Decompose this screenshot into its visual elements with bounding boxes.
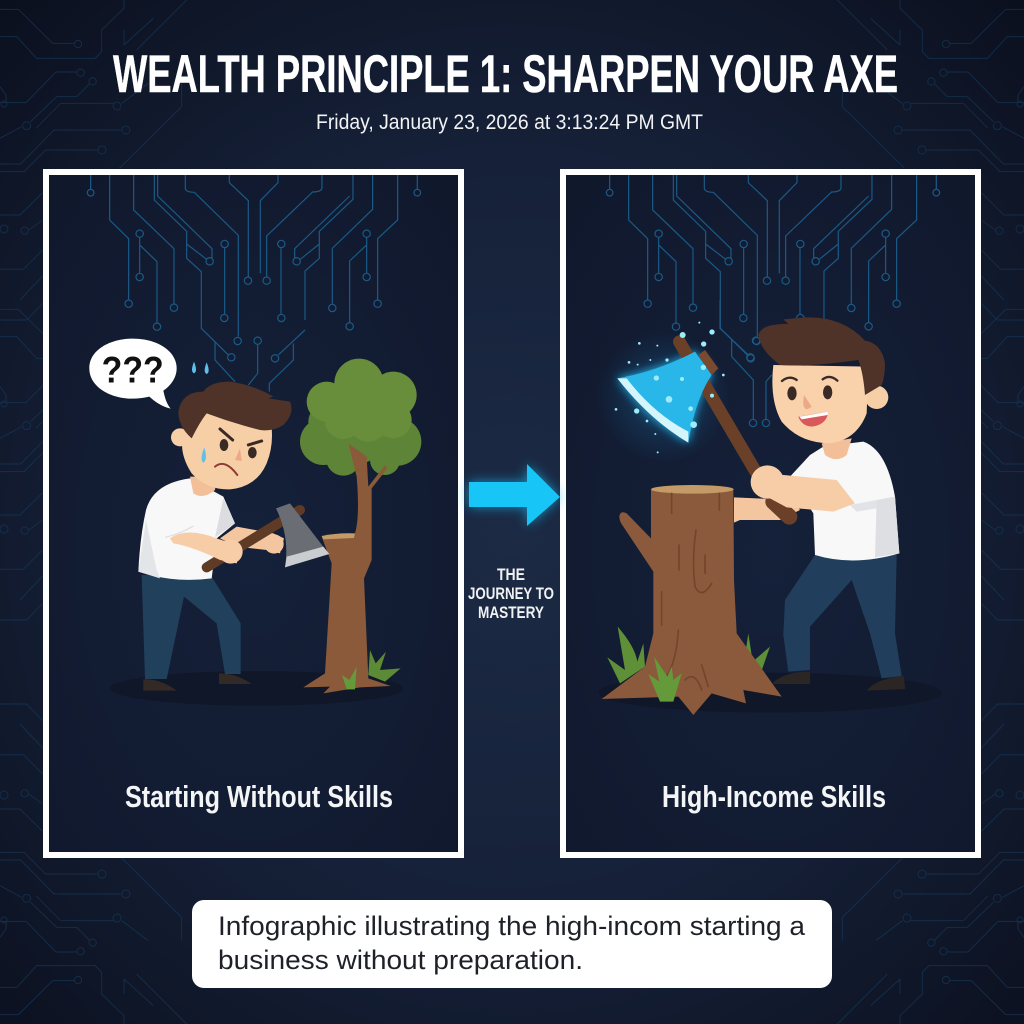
man — [138, 382, 329, 691]
arrow caption: THE — [497, 565, 525, 584]
right panel circuit traces — [606, 175, 940, 361]
tree stump — [602, 485, 782, 715]
man — [734, 317, 905, 691]
icon: dull grey axe head — [276, 503, 328, 567]
axe glow — [597, 330, 730, 463]
panel: starting without skills — [46, 172, 461, 855]
arrow caption — [468, 565, 554, 622]
icon: tree — [300, 359, 421, 693]
panel: high-income skills — [563, 172, 978, 855]
speech bubble: ??? — [102, 348, 164, 390]
arrow: journey between panels — [469, 464, 560, 526]
speech bubble — [89, 339, 177, 409]
caption box: business without preparation. — [218, 945, 583, 975]
icon: sweat drops — [192, 362, 209, 374]
illustration: happy man with glowing sharp axe and stump — [597, 300, 942, 715]
icon: grass — [607, 627, 770, 683]
subtitle timestamp: Friday, January 23, 2026 at 3:13:24 PM GMT — [316, 111, 703, 134]
caption box: Infographic illustrating the high-incom starting a — [218, 911, 806, 941]
panel label: Starting Without Skills — [125, 779, 393, 814]
icon: glowing blue axe — [615, 322, 757, 473]
caption box — [192, 900, 832, 988]
arrow caption: JOURNEY TO — [468, 584, 554, 603]
arrow caption: MASTERY — [478, 603, 545, 622]
illustration: frustrated man chopping tree with dull axe — [89, 330, 421, 706]
left panel circuit traces — [87, 175, 421, 361]
panel label: High-Income Skills — [662, 779, 886, 814]
